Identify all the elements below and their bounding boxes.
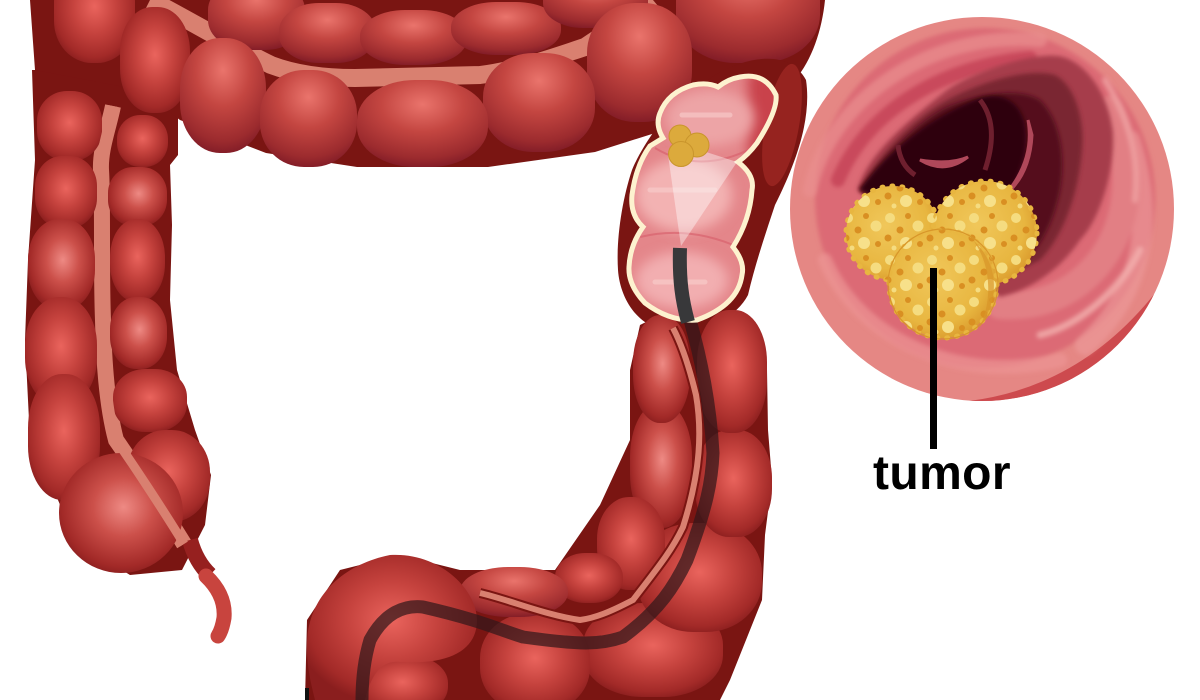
highlighted colon section [626,74,779,324]
lower right crescent [970,294,1154,401]
light cone [668,150,737,246]
magnified view of colon lumen [790,17,1174,404]
upper descending colon behind highlight [618,59,810,331]
transverse colon [30,0,825,167]
appendix [190,540,224,636]
tumor label: tumor [873,447,1011,500]
small tumor [668,125,709,166]
taenia band [101,106,184,544]
taenia band [480,328,699,620]
descending and sigmoid colon [305,310,772,700]
endoscope tube inside colon [362,320,713,700]
endoscope tip [680,248,688,322]
ascending colon [25,70,224,636]
tumor pointer line [930,268,937,449]
lumen [857,56,1113,297]
tumor masses [846,181,1037,339]
colon [25,0,825,700]
